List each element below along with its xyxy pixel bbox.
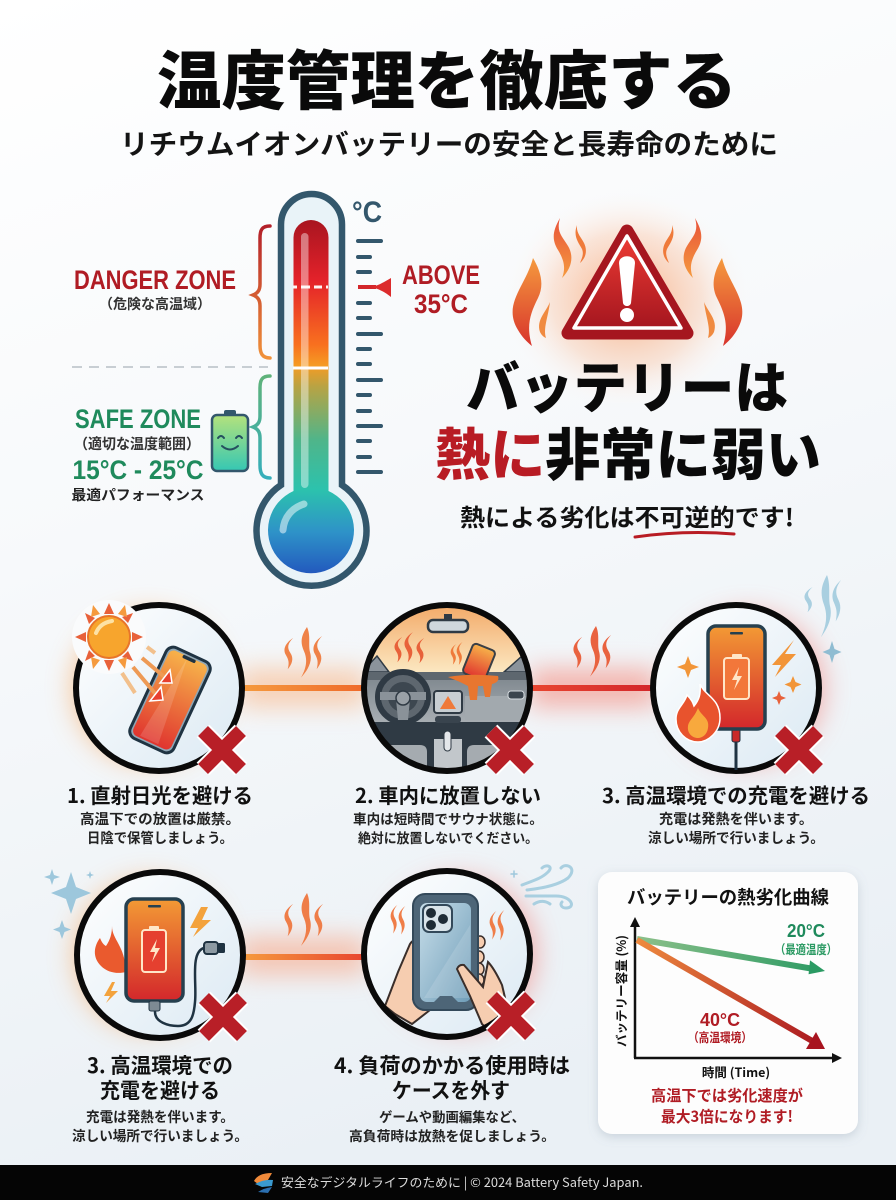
headline: バッテリーは [466, 344, 788, 425]
chart axes [630, 917, 842, 1063]
step 3b caption [72, 1050, 248, 1146]
chart title: バッテリーの熱劣化曲線 [627, 884, 829, 910]
icon: hot phone [126, 899, 183, 1011]
40°C label: 40°C [700, 1010, 740, 1030]
icon: hot phone [708, 626, 765, 729]
step 2 caption: 車内は短時間でサウナ状態に。 [353, 808, 543, 828]
footer [0, 1165, 896, 1200]
title: 温度管理を徹底する [157, 31, 737, 123]
step 3 caption [602, 779, 870, 848]
icon: phone in the sun [127, 645, 213, 755]
icon: car interior [367, 608, 527, 768]
step 4 caption [334, 1050, 570, 1145]
icon: flame [95, 926, 126, 973]
X mark 3 [780, 731, 818, 769]
label: above 35°C: 35°C [414, 289, 468, 319]
step 3 caption: 涼しい場所で行いましょう。 [648, 828, 824, 848]
X mark 5 [492, 997, 530, 1035]
icon: footer logo [254, 1173, 273, 1193]
label: above 35°C [402, 260, 480, 319]
icon: smiling battery [212, 410, 248, 471]
footer text: 安全なデジタルライフのために | © 2024 Battery Safety Japan. [281, 1172, 643, 1191]
40°C label [688, 1010, 752, 1046]
icon: heat flames around warning [513, 218, 742, 346]
step 3b caption: 充電を避ける [100, 1075, 220, 1105]
step 4 caption: ケースを外す [392, 1075, 510, 1105]
step 3b caption: 涼しい場所で行いましょう。 [72, 1126, 248, 1146]
danger zone label [74, 265, 236, 314]
step 4 caption: 高負荷時は放熱を促しましょう。 [349, 1125, 555, 1145]
y axis label: バッテリー容量 (%) [611, 935, 630, 1047]
glow row 2 [74, 878, 536, 1031]
icon: connector plug [204, 942, 225, 954]
step 1 caption: 高温下での放置は厳禁。 [80, 809, 240, 829]
step 4 caption: 4. 負荷のかかる使用時は [334, 1050, 570, 1080]
step 1 caption [67, 779, 253, 848]
step 4 caption: ゲームや動画編集など、 [379, 1106, 525, 1126]
temperature scale: °C [352, 196, 382, 229]
icon: breeze [511, 866, 572, 908]
danger zone label: （危険な高温域） [99, 294, 211, 314]
icon: charging cable [732, 728, 740, 770]
connector: step 1 to 2 [244, 685, 364, 691]
icon: heat waves 3 [284, 893, 323, 946]
40°C line [637, 940, 825, 1049]
glow row 1 [72, 612, 824, 764]
chart note [651, 1084, 803, 1127]
label: above 35°C: ABOVE [402, 260, 480, 290]
step 3 caption: 充電は発熱を伴います。 [659, 809, 813, 829]
icon: sun [75, 603, 143, 671]
safe zone label: （適切な温度範囲） [74, 433, 200, 454]
subtitle: リチウムイオンバッテリーの安全と長寿命のために [120, 123, 778, 163]
safe zone label [72, 404, 204, 505]
headline [435, 344, 821, 492]
icon: sun rays [122, 647, 172, 701]
danger zone bracket [253, 226, 270, 358]
icon: heat waves 1 [284, 627, 322, 678]
chart note: 高温下では劣化速度が [651, 1084, 803, 1106]
20°C label: （最適温度） [775, 939, 837, 958]
step 1 caption: 1. 直射日光を避ける [67, 779, 253, 809]
step 3b: charging in heat [77, 872, 243, 1038]
step 2 caption: 絶対に放置しないでください。 [358, 827, 538, 847]
step 3: charging in heat [653, 605, 819, 771]
step 3b caption: 3. 高温環境での [87, 1050, 233, 1080]
step 2: inside a car [361, 602, 533, 774]
safe zone label: 15°C - 25°C [72, 455, 204, 485]
safe zone bracket [253, 376, 270, 478]
step 1: direct sunlight [72, 600, 242, 771]
thermometer [256, 194, 366, 586]
X mark 1 [203, 731, 241, 769]
step 2 caption [353, 779, 543, 847]
step 1 caption: 日陰で保管しましょう。 [87, 828, 233, 848]
20°C label [775, 921, 837, 958]
20°C label: 20°C [787, 921, 825, 941]
step 3 caption: 3. 高温環境での充電を避ける [602, 779, 870, 809]
icon: flame [676, 684, 720, 742]
icon: heat waves 2 [573, 626, 611, 677]
safe zone label: SAFE ZONE [75, 404, 201, 434]
headline: 熱に非常に弱い [435, 411, 821, 492]
icon: sparks and lightning [677, 640, 802, 705]
40°C label: （高温環境） [688, 1027, 752, 1046]
step 3b caption: 充電は発熱を伴います。 [86, 1107, 234, 1127]
danger zone label: DANGER ZONE [74, 265, 236, 295]
temperature scale [352, 196, 391, 472]
sub-headline: 熱による劣化は不可逆的です! [460, 498, 794, 533]
20°C line [637, 939, 826, 976]
icon: sparkles [44, 869, 94, 939]
X mark 4 [204, 998, 242, 1036]
chart note: 最大3倍になります! [661, 1105, 793, 1127]
icon: hands holding phone [385, 894, 506, 1032]
icon: cool steam and sparkle [805, 575, 842, 663]
warning glow [502, 188, 752, 412]
X mark 2 [491, 731, 529, 769]
x axis label: 時間 (Time) [702, 1062, 770, 1081]
connector: step 2 to 3 [531, 685, 653, 691]
step 4: remove case [364, 871, 530, 1037]
step 2 caption: 2. 車内に放置しない [355, 779, 541, 809]
connector: row 2 [244, 954, 364, 960]
icon: warning triangle [568, 231, 687, 333]
safe zone label: 最適パフォーマンス [72, 485, 204, 505]
icon: charging cable [155, 948, 204, 1026]
panel: degradation curve [598, 872, 858, 1134]
icon: lightning bolts [104, 907, 211, 1003]
